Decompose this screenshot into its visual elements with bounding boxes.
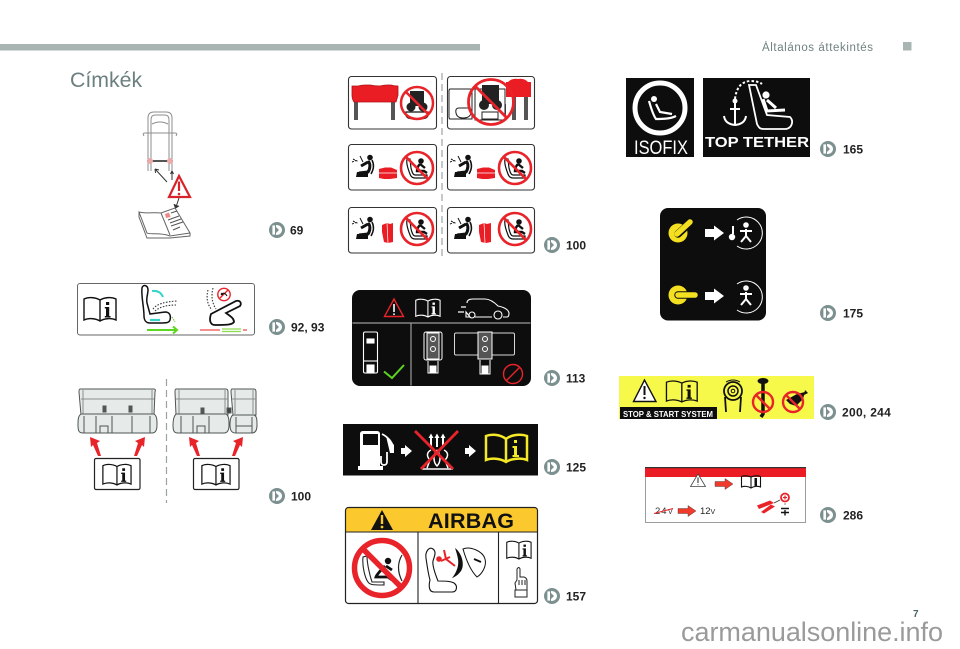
reference 175: 175 — [843, 306, 863, 320]
reference 200, 244: 200, 244 — [842, 406, 891, 420]
panel: front seat right — [448, 76, 534, 129]
icon: rear bench right — [173, 389, 257, 433]
icon: book — [507, 541, 531, 559]
reference 175 — [820, 305, 863, 321]
panel: airbag warning row 2 right — [448, 144, 534, 190]
icon: warning triangle — [634, 380, 656, 402]
icon: book — [666, 381, 697, 402]
reference 69: 69 — [290, 224, 304, 238]
icon: yellow book — [486, 435, 527, 462]
reference 125: 125 — [566, 460, 586, 474]
icon: crossed heater — [415, 431, 458, 469]
icon: forbidden bench buckle — [454, 332, 514, 374]
page number: 7 — [913, 609, 919, 620]
icon: jumper clamp — [757, 494, 789, 514]
panel: airbag warning row 3 left — [348, 208, 436, 253]
label: 12V: 12 — [700, 506, 711, 517]
icon: pointing hand — [515, 568, 527, 597]
panel: child lock — [660, 208, 766, 320]
icon: switch unlocked — [668, 286, 696, 304]
icon: child seat — [649, 96, 676, 119]
reference 69 — [269, 222, 304, 238]
icon: no tool — [753, 378, 773, 417]
icon: belt coil — [724, 380, 742, 412]
reference 165 — [820, 141, 863, 157]
heading: AIRBAG: AIRBAG — [428, 509, 514, 533]
reference 157 — [544, 588, 586, 604]
icon: book box left — [94, 458, 140, 490]
reference 200, 244 — [820, 404, 891, 420]
reference 113 — [544, 370, 586, 386]
label: 12V: V — [710, 509, 716, 516]
icon: reclining seat — [142, 286, 177, 334]
icon: book — [416, 299, 440, 317]
title: Címkék — [70, 68, 143, 92]
icon: rear bench left — [78, 389, 157, 433]
label: van warning — [139, 112, 190, 238]
reference 113: 113 — [566, 372, 586, 386]
icon: permitted buckle — [364, 332, 378, 373]
icon: switch locked — [668, 222, 691, 242]
icon: forbidden buckle — [424, 332, 442, 373]
icon: warning triangle — [384, 299, 404, 316]
label: STOP & START SYSTEM: STOP & START SYSTEM — [623, 409, 713, 419]
panel: seat recline label — [78, 284, 254, 335]
reference 100 middle: 100 — [566, 238, 586, 252]
panel: airbag warning row 3 right — [448, 208, 534, 253]
panel: fuel label — [343, 424, 538, 476]
icon: book — [742, 476, 760, 488]
arrows: red pointers — [90, 437, 243, 456]
icon: child with key — [729, 217, 762, 249]
icon: airbag deployment — [426, 548, 485, 592]
arrow: red — [715, 478, 733, 490]
icon: no spray — [783, 390, 808, 412]
arrow: second — [465, 445, 476, 457]
icon: folded seat prohibited — [200, 288, 247, 332]
icon: forbidden child seat — [354, 540, 410, 596]
panel: airbag warning row 2 left — [348, 144, 436, 190]
panel: stop and start — [619, 376, 814, 419]
reference 125 — [544, 459, 586, 475]
panel: airbag label — [346, 508, 538, 604]
reference 157: 157 — [566, 590, 586, 604]
reference 165: 165 — [843, 142, 863, 156]
heading: ISOFIX: ISOFIX — [634, 138, 688, 159]
reference 100 left — [269, 488, 311, 504]
panel: ISOFIX seat position label — [352, 290, 531, 386]
arrow: lock — [705, 226, 724, 240]
icon: warning triangle — [371, 510, 393, 530]
icon: warning triangle — [690, 474, 706, 486]
panel: front seat left — [348, 76, 436, 129]
panel: rear seat anchors — [78, 389, 257, 490]
icon: check mark — [384, 365, 404, 378]
icon: book — [84, 298, 116, 321]
panel: ISOFIX — [626, 78, 694, 159]
panel: 24V/12V battery label — [645, 467, 806, 522]
icon: battery polarity — [781, 508, 789, 516]
icon: anchor and seat — [724, 81, 792, 129]
reference 92, 93 — [269, 319, 325, 335]
arrow: first — [401, 445, 412, 457]
section heading: Általános áttekintés — [762, 41, 873, 54]
icon: prohibited sign — [504, 364, 522, 384]
section marker — [903, 42, 912, 50]
label: 12V — [700, 506, 716, 517]
heading: TOP TETHER: TOP TETHER — [705, 134, 809, 151]
label: 24V struck through: V — [668, 509, 673, 516]
label: 24V struck through — [654, 506, 673, 517]
label: 24V struck through: 24 — [655, 506, 668, 517]
header bar — [0, 44, 480, 50]
reference 100 middle — [544, 237, 586, 253]
icon: book box right — [194, 458, 239, 490]
reference 286: 286 — [843, 508, 863, 522]
arrow: unlock — [705, 288, 724, 304]
panel: top tether — [703, 78, 810, 157]
reference 286 — [820, 507, 863, 523]
reference 100 left: 100 — [291, 490, 311, 504]
icon: van — [458, 299, 509, 319]
watermark: carmanualsonline.info — [681, 617, 943, 647]
arrow: red voltage — [678, 506, 696, 516]
icon: child — [737, 281, 762, 313]
reference 92, 93: 92, 93 — [291, 320, 325, 334]
icon: fuel pump — [358, 431, 394, 470]
